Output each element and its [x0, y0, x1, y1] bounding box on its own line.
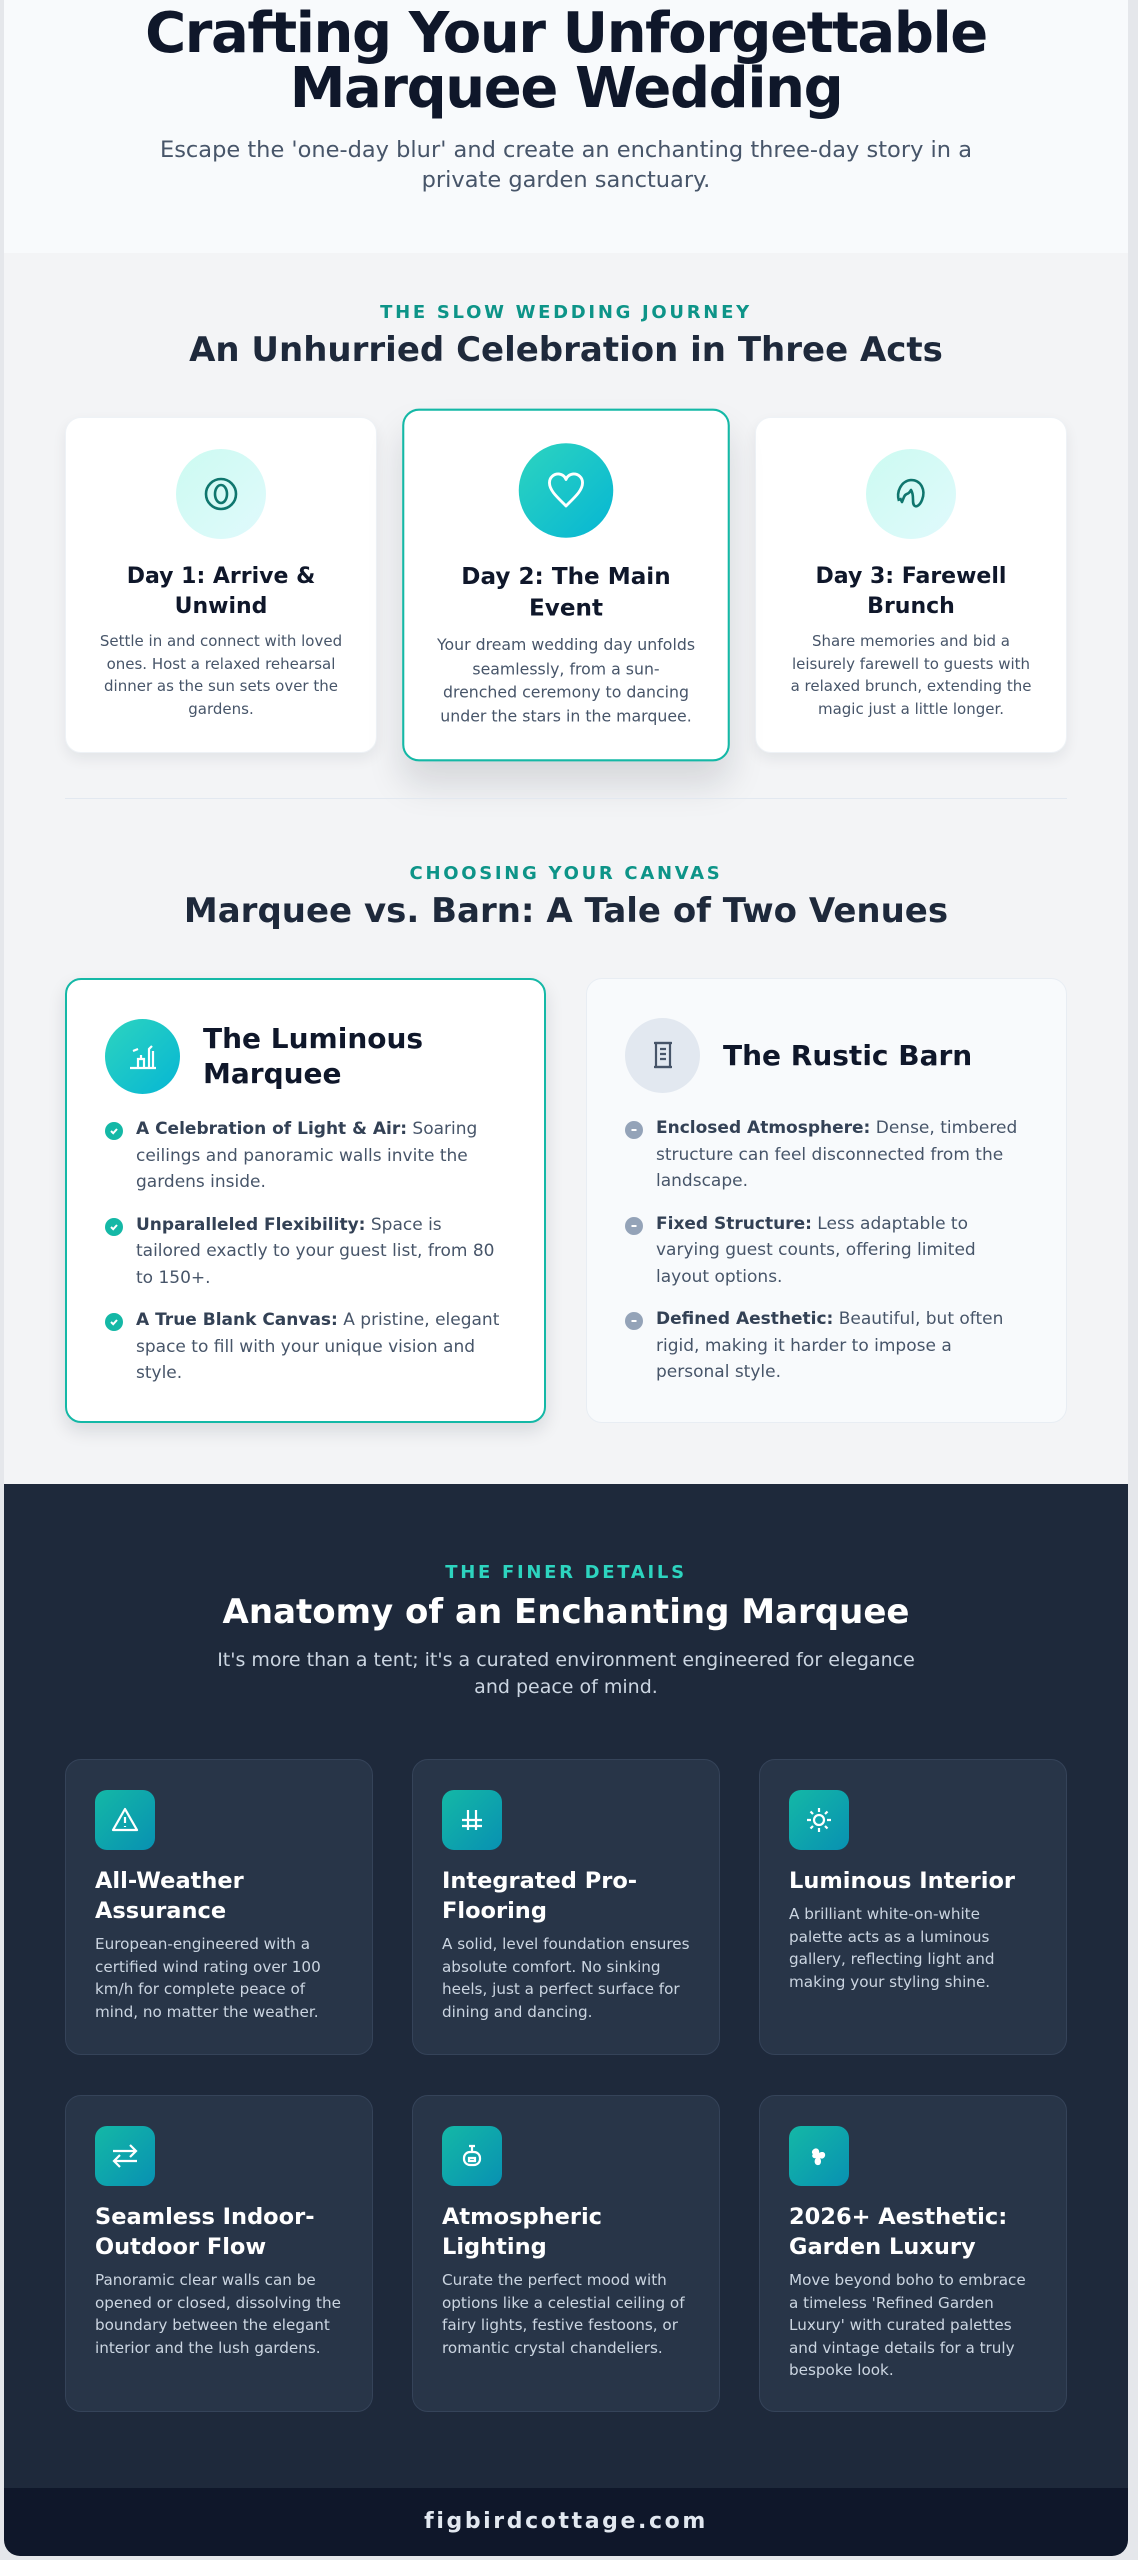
icon: arrows [95, 2126, 155, 2186]
feature: flooring: A solid, level foundation ensures absolute comfort. No sinking heels, just a perfect surface for dining and dancing. [442, 1935, 690, 2021]
feature: lighting: Atmospheric Lighting [442, 2204, 602, 2260]
panel: luminous marquee [65, 978, 546, 1423]
header background [4, 0, 1128, 253]
title [145, 1, 987, 121]
marquee header [105, 1019, 423, 1094]
barn cons list [625, 1118, 1017, 1382]
card: day 2 (featured): Day 2: The Main Event [461, 564, 671, 622]
card: day 2 (featured): seamlessly, from a sun- [472, 659, 660, 678]
dark subtitle: It's more than a tent; it's a curated environment engineered for elegance and peace of mind. [217, 1649, 915, 1698]
card: day 2 (featured): drenched ceremony to dancing [443, 683, 689, 702]
dark section background [4, 1484, 1128, 2488]
marquee pros list: Unparalleled Flexibility: Space is tailored exactly to your guest list, from 80 to 150+. [136, 1214, 494, 1288]
barn cons list: Fixed Structure: Less adaptable to varying guest counts, offering limited layout options. [656, 1214, 976, 1286]
card: day 2 (featured): Your dream wedding day unfolds [437, 635, 695, 654]
card: day 2 (featured) [402, 409, 730, 761]
feature: aesthetic [759, 2095, 1067, 2412]
feature: flooring [412, 1759, 720, 2055]
section label: slow wedding journey: THE SLOW WEDDING JOURNEY [380, 302, 752, 323]
card: day 3 [755, 417, 1067, 753]
feature: aesthetic: 2026+ Aesthetic: Garden Luxury [789, 2204, 1007, 2260]
feature: all-weather: European-engineered with a certified wind rating over 100 km/h for complete peace of mind, no matter the weather. [95, 1935, 321, 2021]
icon: rings [176, 449, 266, 539]
card: day 1: Day 1: Arrive & Unwind [127, 564, 315, 619]
section label: choosing your canvas: CHOOSING YOUR CANVAS [410, 863, 722, 884]
feature: all-weather [65, 1759, 373, 2055]
subtitle: Escape the 'one-day blur' and create an enchanting three-day story in a private garden sanctuary. [160, 137, 972, 193]
heading: anatomy: Anatomy of an Enchanting Marquee [223, 1592, 909, 1632]
barn header [625, 1018, 972, 1093]
feature: flooring: Integrated Pro-Flooring [442, 1868, 637, 1924]
marquee pros list [105, 1119, 499, 1383]
feature: all-weather: All-Weather Assurance [95, 1868, 244, 1924]
footer: figbirdcottage.com [424, 2509, 708, 2534]
panel: rustic barn [586, 978, 1067, 1423]
marquee pros list: A Celebration of Light & Air: Soaring ceilings and panoramic walls invite the gardens inside. [136, 1119, 477, 1192]
card: day 3: Day 3: Farewell Brunch [816, 564, 1006, 619]
feature: indoor-outdoor: Panoramic clear walls can be opened or closed, dissolving the boundary between the elegant interior and the lush gardens. [95, 2271, 341, 2357]
icon: warning [95, 1790, 155, 1850]
card: day 3: Share memories and bid a leisurely farewell to guests with a relaxed brunch, extending the magic just a little longer. [791, 632, 1031, 718]
feature: indoor-outdoor: Seamless Indoor-Outdoor Flow [95, 2204, 315, 2260]
marquee header: Marquee [203, 1057, 342, 1090]
icon: heart [519, 443, 613, 538]
heading: three acts: An Unhurried Celebration in Three Acts [189, 330, 943, 370]
marquee pros list: A True Blank Canvas: A pristine, elegant space to fill with your unique vision and style. [136, 1310, 499, 1383]
barn header: The Rustic Barn [723, 1038, 972, 1072]
icon: lamp [442, 2126, 502, 2186]
icon: sun [789, 1790, 849, 1850]
feature: luminous interior [759, 1759, 1067, 2055]
card: day 1: Settle in and connect with loved ones. Host a relaxed rehearsal dinner as the sun sets over the gardens. [100, 632, 342, 718]
section 2 background [4, 253, 1128, 1484]
heading: marquee vs barn: Marquee vs. Barn: A Tale of Two Venues [184, 891, 948, 931]
feature: aesthetic: Move beyond boho to embrace a timeless 'Refined Garden Luxury' with curated palettes and vintage details for a truly bespoke look. [789, 2271, 1026, 2379]
feature: luminous interior: A brilliant white-on-white palette acts as a luminous gallery, reflecting light and making your styling shine. [789, 1905, 994, 1991]
icon: bow [789, 2126, 849, 2186]
barn cons list: Enclosed Atmosphere: Dense, timbered structure can feel disconnected from the landscape. [656, 1118, 1017, 1191]
barn cons list: Defined Aesthetic: Beautiful, but often rigid, making it harder to impose a personal style. [656, 1309, 1003, 1382]
icon: floor grid [442, 1790, 502, 1850]
feature: indoor-outdoor [65, 2095, 373, 2412]
feature: lighting [412, 2095, 720, 2412]
marquee header: The Luminous [203, 1022, 423, 1055]
card: day 1 [65, 417, 377, 753]
icon: brunch [866, 449, 956, 539]
card: day 2 (featured): under the stars in the marquee. [440, 706, 692, 725]
feature: lighting: Curate the perfect mood with options like a celestial ceiling of fairy lights, festive festoons, or romantic crystal chandeliers. [442, 2271, 685, 2357]
footer [4, 2488, 1128, 2556]
feature: luminous interior: Luminous Interior [789, 1868, 1015, 1894]
title: Marquee Wedding [290, 56, 842, 121]
section label: finer details: THE FINER DETAILS [445, 1562, 687, 1583]
title: Crafting Your Unforgettable [145, 1, 987, 66]
